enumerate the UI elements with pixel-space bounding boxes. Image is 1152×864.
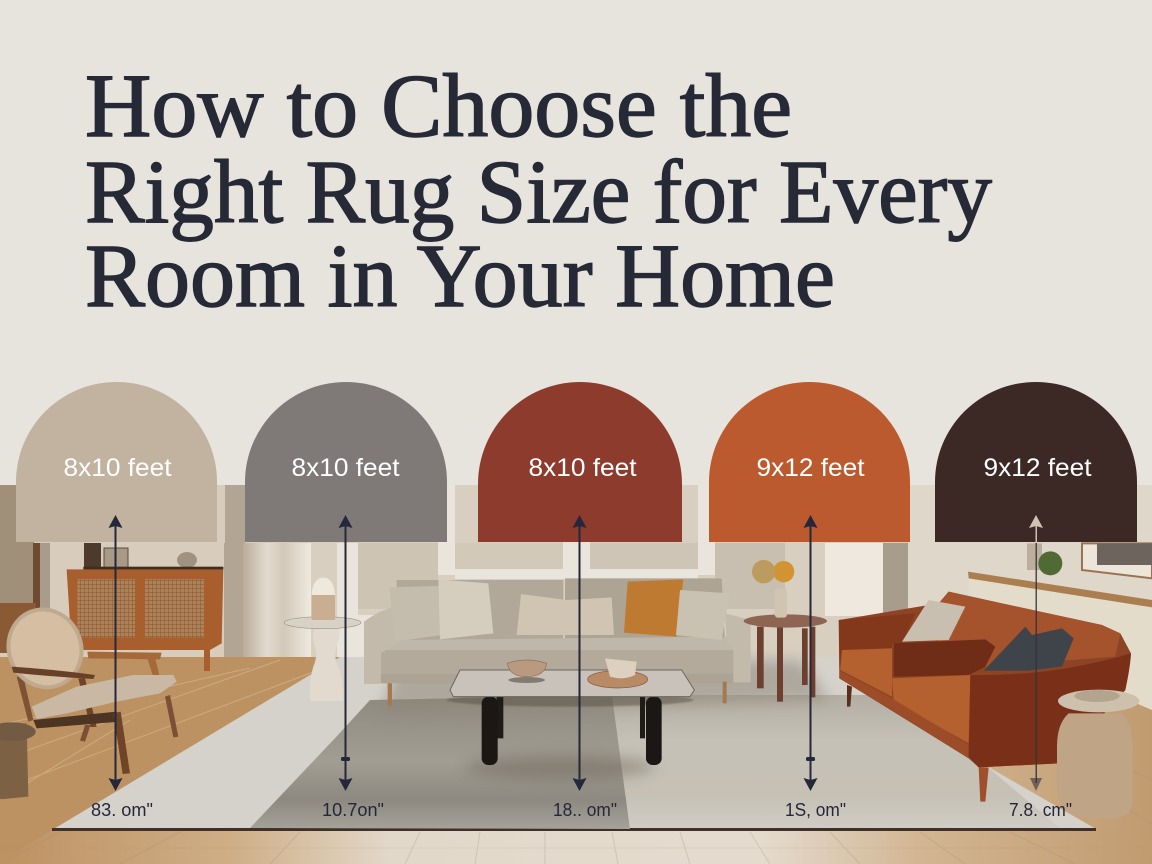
right wall sideboard and art	[968, 543, 1152, 710]
pillows	[389, 579, 730, 642]
size arch: brick red	[478, 382, 682, 542]
arrow: dark brown dimension	[1029, 515, 1043, 791]
size arch: dark brown: 9x12 feet	[984, 454, 1092, 482]
arrow: brick red dimension	[572, 515, 586, 791]
dimension labels	[91, 800, 1072, 820]
dimension labels: 83. om"	[91, 800, 153, 820]
size arch: brick red: 8x10 feet	[528, 454, 637, 482]
leather sofa	[839, 592, 1131, 802]
living room scene	[0, 485, 1152, 864]
size arch: beige: 8x10 feet	[64, 454, 172, 482]
size arch: beige	[16, 382, 217, 542]
title: Room in Your Home	[85, 227, 835, 326]
dimension labels: 18.. om"	[553, 800, 617, 820]
size arch: grey	[245, 382, 447, 542]
stone side table	[1057, 690, 1139, 818]
arrow: terracotta dimension	[804, 515, 818, 791]
arrow: grey dimension	[338, 515, 352, 791]
floor	[0, 657, 1152, 864]
dimension labels: 7.8. cm"	[1009, 800, 1072, 820]
round wooden table and flowers	[744, 560, 827, 702]
size arch: terracotta	[709, 382, 910, 542]
rattan sideboard	[67, 567, 223, 671]
side table and sculpture	[284, 577, 361, 701]
title	[85, 57, 992, 326]
lounge chair	[0, 598, 178, 799]
size arch: terracotta: 9x12 feet	[756, 454, 865, 482]
dimension labels: 1S, om"	[785, 800, 846, 820]
size arch: dark brown	[935, 382, 1137, 542]
curtain	[224, 543, 311, 663]
beige sofa	[364, 578, 751, 706]
coffee table	[447, 658, 694, 765]
title: Right Rug Size for Every	[85, 143, 992, 242]
wall and windows	[0, 485, 1152, 660]
area rug	[52, 657, 1096, 831]
arrow: beige dimension	[108, 515, 122, 791]
dimension labels: 10.7on"	[322, 800, 384, 820]
floor planks	[0, 660, 345, 800]
title: How to Choose the	[85, 57, 792, 156]
size arch: grey: 8x10 feet	[292, 454, 400, 482]
